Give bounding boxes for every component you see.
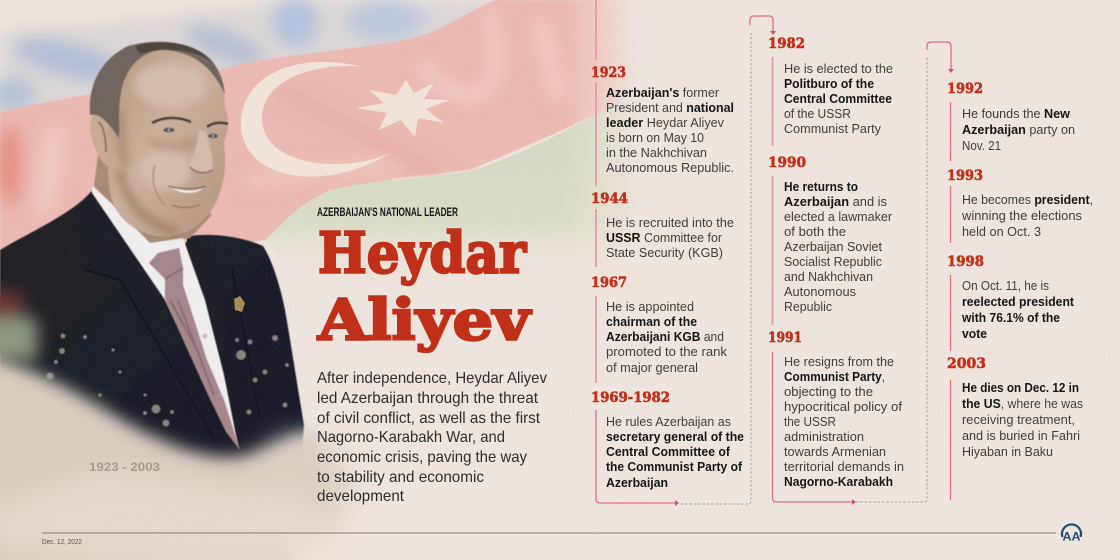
entry: 1992: He founds the New — [962, 107, 1070, 121]
entry: 2003: 2003 — [947, 356, 986, 372]
entry: 1944: He is recruited into the — [606, 216, 734, 230]
entry: 1991: territorial demands in — [784, 460, 904, 474]
footer — [42, 524, 1081, 546]
entry: 1944 — [591, 191, 734, 260]
entry: 1982: of the USSR — [784, 107, 851, 121]
entry: 1923: leader Heydar Aliyev — [606, 116, 725, 130]
entry: 1923: Azerbaijan's former — [606, 86, 719, 100]
entry: 1998: reelected president — [962, 295, 1075, 309]
title: name: Aliyev — [317, 288, 532, 354]
entry: 1944: USSR Committee for — [606, 231, 722, 245]
date: Dec. 12, 2022 — [42, 539, 82, 546]
intro paragraph: led Azerbaijan through the threat — [317, 390, 539, 407]
timeline column 2 — [768, 36, 904, 489]
portrait of Heydar Aliyev — [0, 42, 348, 560]
entry: 1998: On Oct. 11, he is — [962, 279, 1049, 293]
eight-pointed star — [356, 80, 450, 137]
entry: 1998 — [947, 254, 1075, 341]
entry: 1923: in the Nakhchivan — [606, 146, 707, 160]
entry: 1991: Nagorno-Karabakh — [784, 475, 893, 489]
entry: 1991: 1991 — [768, 330, 802, 346]
entry: 1967: Azerbaijani KGB and — [606, 330, 724, 344]
entry: 1991: Communist Party, — [784, 370, 885, 384]
entry: 1923 — [591, 65, 734, 175]
entry: 1992: 1992 — [947, 81, 983, 97]
shirt — [92, 186, 238, 445]
title: name: Heydar — [318, 220, 527, 286]
entry: 1969-1982: Azerbaijan — [606, 476, 668, 490]
entry: 1993: He becomes president, — [962, 193, 1093, 207]
entry: 1967: of major general — [606, 361, 698, 375]
entry: 1991: He resigns from the — [784, 355, 894, 369]
title: name — [317, 220, 532, 354]
entry: 1967: 1967 — [591, 275, 627, 291]
entry: 1991: objecting to the — [784, 385, 873, 399]
entry: 1969-1982: 1969-1982 — [591, 390, 670, 406]
entry: 1923: President and national — [606, 101, 734, 115]
neck — [94, 155, 212, 245]
entry: 1991: the USSR — [784, 415, 836, 429]
ear — [90, 112, 114, 167]
intro paragraph: After independence, Heydar Aliyev — [317, 370, 547, 387]
entry: 1982: Communist Party — [784, 122, 882, 136]
entry: 1993: 1993 — [947, 168, 983, 184]
entry: 1982: He is elected to the — [784, 62, 893, 76]
timeline column 1 — [591, 65, 744, 490]
entry: 1992: Nov. 21 — [962, 139, 1001, 153]
entry: 1991: towards Armenian — [784, 445, 886, 459]
entry: 1990: and Nakhchivan — [784, 270, 873, 284]
necktie — [149, 248, 240, 450]
entry: 1998: with 76.1% of the — [961, 311, 1060, 325]
entry: 1990 — [768, 155, 892, 314]
entry: 1982: Politburo of the — [784, 77, 874, 91]
entry: 1982: 1982 — [768, 36, 805, 52]
entry: 1923: Autonomous Republic. — [606, 161, 734, 175]
entry: 1998: vote — [962, 327, 987, 341]
timeline column 3 — [947, 81, 1093, 459]
entry: 1993 — [947, 168, 1093, 239]
kicker heading: AZERBAIJAN'S NATIONAL LEADER — [317, 207, 458, 219]
entry: 1944: 1944 — [591, 191, 628, 207]
entry: 2003: and is buried in Fahri — [962, 429, 1080, 443]
entry: 1991: administration — [784, 430, 864, 444]
red band — [0, 0, 660, 260]
entry: 2003: Hiyaban in Baku — [962, 445, 1053, 459]
facial features — [152, 118, 228, 208]
intro paragraph: Nagorno-Karabakh War, and — [317, 429, 505, 446]
entry: 1991: hypocritical policy of — [784, 400, 903, 414]
intro paragraph: to stability and economic — [317, 469, 484, 486]
paint splatter — [46, 334, 289, 426]
entry: 1967: He is appointed — [606, 300, 694, 314]
entry: 2003: He dies on Dec. 12 in — [962, 381, 1079, 395]
entry: 1992: Azerbaijan party on — [962, 123, 1075, 137]
face — [108, 42, 228, 237]
intro paragraph: development — [317, 488, 405, 505]
entry: 1990: Socialist Republic — [784, 255, 882, 269]
suit — [0, 191, 304, 480]
entry: 1990: Azerbaijan Soviet — [784, 240, 883, 254]
intro paragraph: of civil conflict, as well as the first — [317, 410, 541, 427]
green band — [266, 103, 620, 248]
icon: agency logo: AA — [1062, 530, 1081, 544]
intro paragraph: economic crisis, paving the way — [317, 449, 527, 466]
entry: 1969-1982: the Communist Party of — [606, 460, 743, 474]
entry: 1990: 1990 — [768, 155, 806, 171]
entry: 1969-1982: Central Committee of — [606, 445, 731, 459]
entry: 1944: State Security (KGB) — [606, 246, 723, 260]
entry: 1990: Autonomous — [784, 285, 856, 299]
icon: agency logo — [1062, 524, 1081, 544]
entry: 1923: is born on May 10 — [606, 131, 704, 145]
entry: 1990: Republic — [784, 300, 832, 314]
entry: 2003: receiving treatment, — [962, 413, 1075, 427]
entry: 1990: elected a lawmaker — [784, 210, 892, 224]
entry: 1990: of both the — [784, 225, 846, 239]
entry: 1991 — [768, 330, 904, 489]
entry: 1923: 1923 — [591, 65, 626, 81]
entry: 1998: 1998 — [947, 254, 984, 270]
entry: 2003: the US, where he was — [962, 397, 1083, 411]
entry: 1967: chairman of the — [606, 315, 697, 329]
background: Azerbaijani flag — [0, 0, 626, 250]
entry: 1990: Azerbaijan and is — [784, 195, 887, 209]
entry: 1982 — [768, 36, 893, 136]
faded lower edge of the portrait — [0, 292, 348, 560]
crescent — [241, 62, 391, 177]
entry: 1969-1982: secretary general of the — [606, 430, 744, 444]
hair — [90, 42, 225, 138]
entry: 1967 — [591, 275, 728, 375]
entry: 1967: promoted to the rank — [606, 345, 728, 359]
entry: 1992 — [947, 81, 1075, 153]
entry: 2003 — [947, 356, 1083, 459]
lifespan label: 1923 - 2003 — [89, 462, 160, 474]
intro paragraph — [317, 370, 547, 505]
entry: 1993: held on Oct. 3 — [962, 225, 1041, 239]
head — [90, 42, 228, 237]
lapel pin — [234, 296, 245, 312]
entry: 1969-1982: He rules Azerbaijan as — [606, 415, 731, 429]
suit lapels — [75, 191, 232, 395]
entry: 1982: Central Committee — [784, 92, 892, 106]
entry: 1993: winning the elections — [961, 209, 1082, 223]
entry: 1969-1982 — [591, 390, 744, 490]
entry: 1990: He returns to — [784, 180, 858, 194]
timeline connector lines and arrows — [596, 0, 954, 506]
